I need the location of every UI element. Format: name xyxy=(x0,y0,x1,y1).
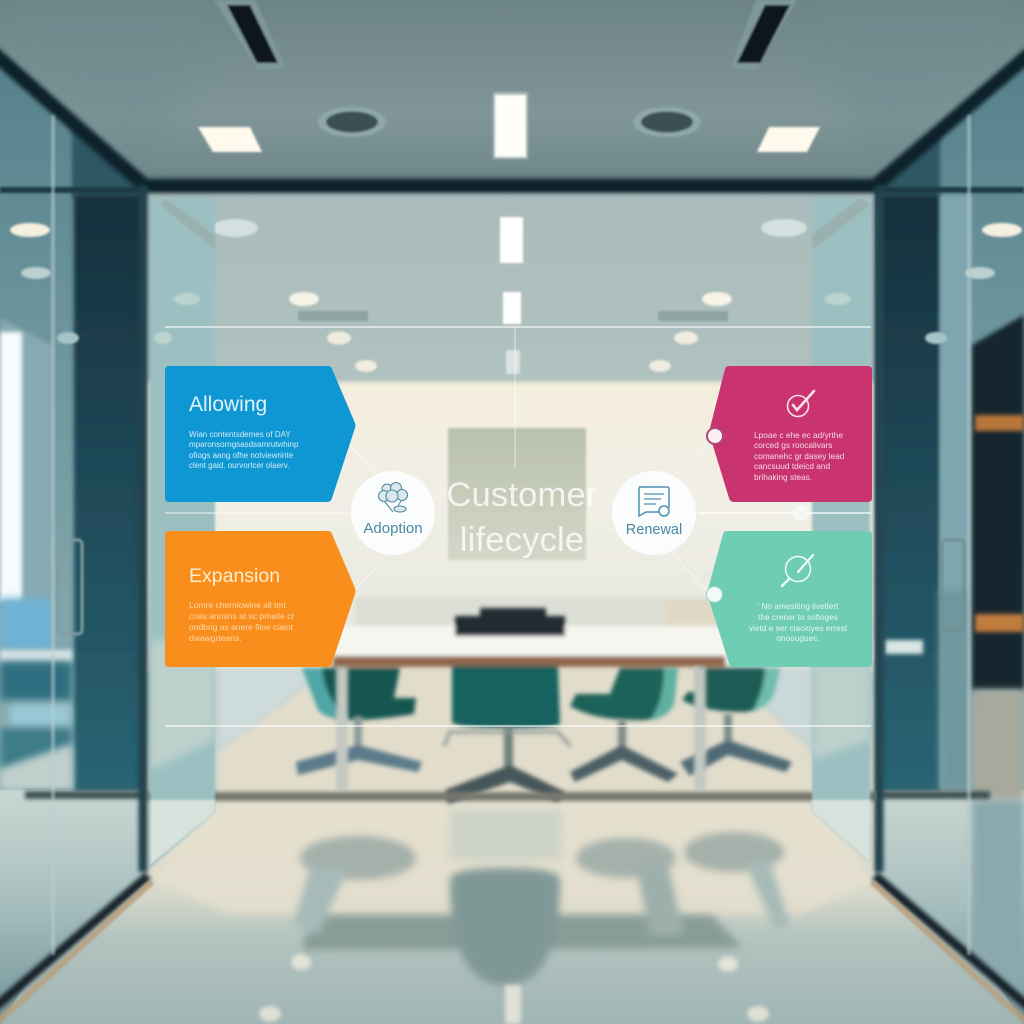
floor xyxy=(0,800,1024,1024)
panel: Teal card: the crener to sofioges xyxy=(758,612,838,622)
panel: Expansion: Expansion xyxy=(189,565,280,587)
connector node: centre right xyxy=(793,505,809,521)
panel: Pink renewal card: corced gs roocalivars xyxy=(754,440,832,450)
panel: Expansion: ondbog as anere fiioe ciaint xyxy=(189,622,293,632)
left glass wall xyxy=(0,50,215,1000)
icon: magnifier with brush xyxy=(780,554,814,588)
panel: Teal card: onoouguec. xyxy=(776,633,820,643)
panel: Pink renewal card: comanehc gr dasey lead xyxy=(754,451,844,461)
panel: Expansion: cnas annsns at sc pmeite cr xyxy=(189,611,294,621)
panel: Expansion: dwawgrteans. xyxy=(189,633,241,643)
ceiling xyxy=(0,0,1024,192)
icon: Renewal circle xyxy=(612,471,696,555)
connector node: teal xyxy=(706,586,723,603)
panel: Pink renewal card: Lpoae c ehe ec ad/yrthe xyxy=(754,430,843,440)
panel: Allowing: clent gaid. ourvortcer olaerv. xyxy=(189,461,289,470)
back room xyxy=(145,190,875,810)
icon: Adoption circle xyxy=(351,471,435,555)
title: Customer xyxy=(446,476,598,514)
right glass wall xyxy=(812,50,1024,1000)
panel: Teal card xyxy=(708,531,872,667)
title xyxy=(446,476,598,559)
panel: Teal card: ' No amesiting livetlert xyxy=(758,601,838,611)
conference table and chairs xyxy=(148,608,920,804)
panel: Allowing: mparonsorngsasdsamrutwhinp xyxy=(189,440,298,449)
panel: Expansion: Lomre cherniowine all tmt xyxy=(189,600,286,610)
icon: cluster xyxy=(378,482,408,512)
title: lifecycle xyxy=(460,521,584,559)
panel: Teal card: vietd e ser ciacioyes errest xyxy=(749,623,847,633)
panel: Allowing: Wian contentsdemes of DAY xyxy=(189,430,291,439)
panel: Pink renewal card: brihaking steas. xyxy=(754,472,812,482)
panel: Allowing xyxy=(165,366,408,502)
panel: Pink renewal card: cancsuud tdeicd and xyxy=(754,461,830,471)
panel: Allowing: ofiogs aang ofhe notviewrinte xyxy=(189,451,293,460)
panel: Pink renewal card xyxy=(710,366,872,502)
panel: Expansion xyxy=(165,531,356,667)
icon: Renewal circle: Renewal xyxy=(626,522,682,538)
panel: Allowing: Allowing xyxy=(189,393,267,416)
icon: check badge xyxy=(786,390,816,418)
icon: document xyxy=(638,486,670,518)
connector node: pink xyxy=(706,427,724,445)
icon: Adoption circle: Adoption xyxy=(363,520,423,537)
rule lines xyxy=(165,327,871,726)
